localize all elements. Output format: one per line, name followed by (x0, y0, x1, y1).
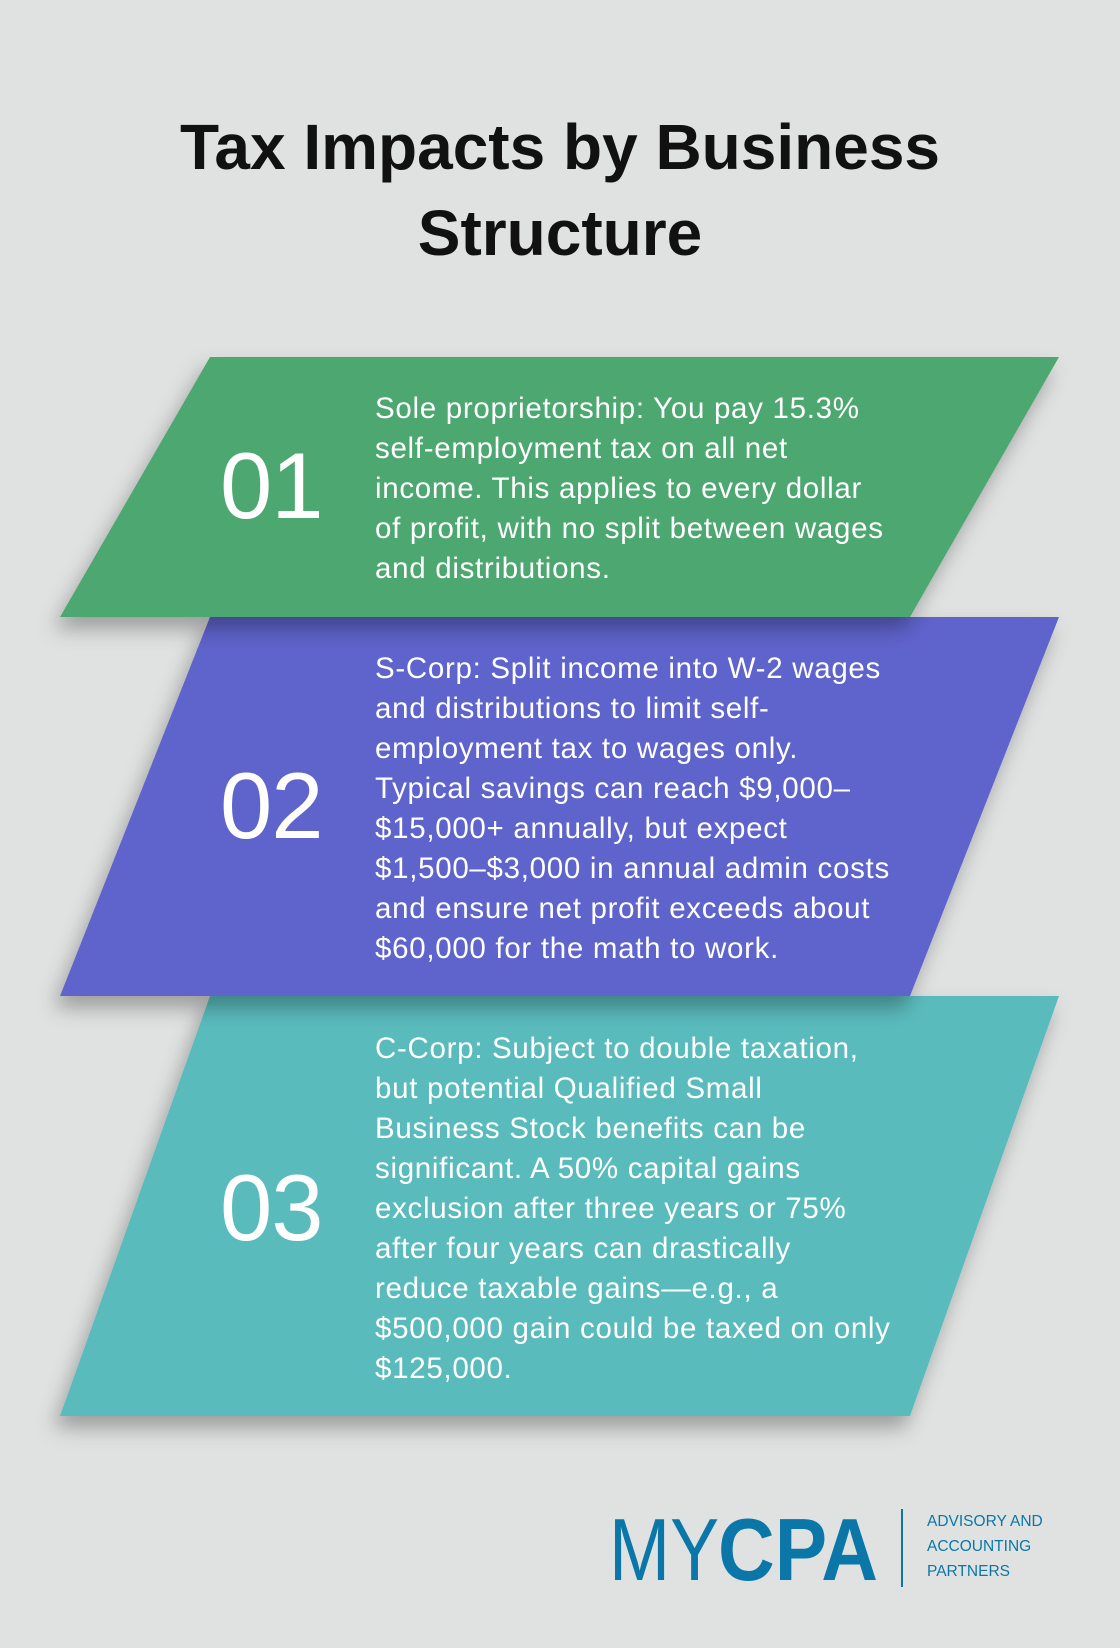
logo: ACCOUNTING (927, 1538, 1031, 1555)
text 03: $125,000. (375, 1352, 513, 1385)
number 02: 02 (220, 753, 323, 858)
text 02: and distributions to limit self- (375, 692, 770, 725)
logo: ADVISORY AND (927, 1513, 1043, 1530)
text 03 (375, 1032, 891, 1385)
text 01: Sole proprietorship: You pay 15.3% (375, 392, 860, 425)
text 02: employment tax to wages only. (375, 732, 798, 765)
text 02 (375, 652, 890, 965)
panel: 03 shape (60, 996, 1059, 1416)
panel: 01 shape (60, 357, 1059, 617)
text 01: of profit, with no split between wages (375, 512, 884, 545)
text 03: exclusion after three years or 75% (375, 1192, 846, 1225)
title (180, 111, 940, 269)
number 03: 03 (220, 1155, 323, 1260)
text 02: S-Corp: Split income into W-2 wages (375, 652, 881, 685)
logo: PARTNERS (927, 1563, 1010, 1580)
text 03: after four years can drastically (375, 1232, 791, 1265)
text 02: and ensure net profit exceeds about (375, 892, 870, 925)
title: Tax Impacts by Business (180, 111, 940, 183)
text 01 (375, 392, 884, 585)
title: Structure (418, 197, 702, 269)
text 03: Business Stock benefits can be (375, 1112, 806, 1145)
text 01: income. This applies to every dollar (375, 472, 862, 505)
text 02: $60,000 for the math to work. (375, 932, 779, 965)
text 03: $500,000 gain could be taxed on only (375, 1312, 891, 1345)
number 01: 01 (220, 433, 323, 538)
text 03: but potential Qualified Small (375, 1072, 763, 1105)
logo (609, 1500, 1043, 1595)
text 03: C-Corp: Subject to double taxation, (375, 1032, 859, 1065)
text 02: Typical savings can reach $9,000– (375, 772, 851, 805)
text 03: reduce taxable gains—e.g., a (375, 1272, 778, 1305)
text 01: and distributions. (375, 552, 611, 585)
text 03: significant. A 50% capital gains (375, 1152, 801, 1185)
panel: 02 shape (60, 617, 1059, 996)
text 01: self-employment tax on all net (375, 432, 788, 465)
text 02: $1,500–$3,000 in annual admin costs (375, 852, 890, 885)
text 02: $15,000+ annually, but expect (375, 812, 788, 845)
